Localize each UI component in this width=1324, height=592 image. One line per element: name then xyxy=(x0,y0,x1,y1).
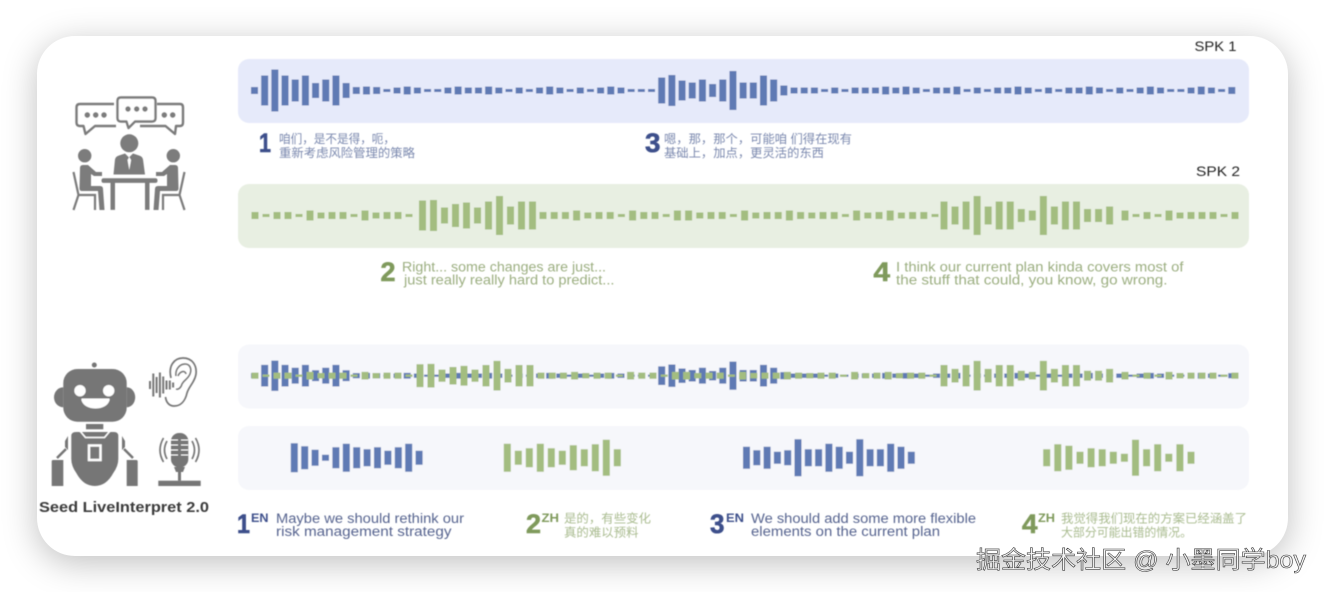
caption: speaker 2 utterance 4: 4 xyxy=(874,257,890,287)
caption: output 3 EN: elements on the current plan xyxy=(751,524,940,539)
icon: robot xyxy=(52,362,138,486)
caption: speaker 1 utterance 3: 嗯，那，那个，可能咱 们得在现有 xyxy=(664,131,852,146)
icon: ear with sound xyxy=(150,358,196,406)
caption: output 1 EN: EN xyxy=(251,511,268,525)
caption: speaker 2 utterance 2 xyxy=(380,257,614,288)
caption: output 2 ZH: ZH xyxy=(542,511,559,525)
watermark: 掘金技术社区 @ 小墨同学boy xyxy=(976,547,1306,574)
waveform: speaker 1 xyxy=(254,70,1232,112)
waveform: output 4 ZH xyxy=(1047,440,1191,476)
icon: microphone xyxy=(158,433,201,486)
icon: left person xyxy=(74,149,104,210)
caption: speaker 1 utterance 3: 基础上，加点，更灵活的东西 xyxy=(664,145,824,160)
caption: output 1 EN: 1 xyxy=(237,509,250,539)
caption: speaker 2 utterance 2: Right... some changes are just... xyxy=(402,260,606,274)
icon: central person xyxy=(114,134,145,174)
caption: output 2 ZH xyxy=(526,509,651,540)
waveform: speaker 2 xyxy=(255,196,1235,235)
caption: output 3 EN: We should add some more flexible xyxy=(751,511,976,526)
caption: output 4 ZH xyxy=(1022,509,1247,540)
caption: speaker 1 utterance 1: 重新考虑风险管理的策略 xyxy=(279,145,415,160)
caption: output 1 EN: risk management strategy xyxy=(276,524,452,539)
caption: output 4 ZH: 大部分可能出错的情况。 xyxy=(1061,524,1192,540)
caption: speaker 1 utterance 1 xyxy=(259,128,415,160)
panel: mixed input track xyxy=(238,344,1249,408)
label: model name: Seed LiveInterpret 2.0 xyxy=(39,500,209,516)
caption: speaker 2 utterance 2: just really really hard to predict... xyxy=(403,272,614,288)
icon: speech bubbles xyxy=(76,98,183,134)
waveform: output 1 EN xyxy=(294,443,419,472)
label: SPK 2: SPK 2 xyxy=(1196,163,1240,179)
caption: speaker 2 utterance 4: I think our current plan kinda covers most of xyxy=(896,260,1184,274)
waveform: mixed blue xyxy=(254,361,1232,391)
caption: output 2 ZH: 2 xyxy=(526,509,541,539)
caption: output 4 ZH: 我觉得我们现在的方案已经涵盖了 xyxy=(1061,510,1247,526)
caption: output 3 EN xyxy=(710,509,976,539)
label: SPK 1: SPK 1 xyxy=(1194,38,1237,54)
caption: speaker 1 utterance 3 xyxy=(645,128,852,160)
caption: output 3 EN: 3 xyxy=(710,509,724,539)
caption: speaker 2 utterance 4: the stuff that could, you know, go wrong. xyxy=(896,272,1168,288)
caption: output 3 EN: EN xyxy=(726,511,744,525)
panel: speaker 2 track xyxy=(238,184,1249,248)
caption: output 2 ZH: 真的难以预料 xyxy=(564,524,638,540)
caption: output 1 EN: Maybe we should rethink our xyxy=(276,511,465,526)
icon: table xyxy=(102,178,158,210)
panel: translated output track xyxy=(238,426,1249,490)
caption: speaker 2 utterance 4 xyxy=(874,257,1184,288)
waveform: output 2 ZH xyxy=(507,440,617,476)
icon: right person xyxy=(154,149,184,210)
caption: output 2 ZH: 是的，有些变化 xyxy=(564,510,651,526)
panel: speaker 1 track xyxy=(238,59,1249,123)
caption: speaker 1 utterance 1: 1 xyxy=(259,128,271,158)
caption: output 4 ZH: ZH xyxy=(1038,511,1055,525)
caption: output 1 EN xyxy=(237,509,465,539)
caption: speaker 1 utterance 3: 3 xyxy=(645,128,660,158)
waveform: mixed green xyxy=(255,361,1235,391)
caption: output 4 ZH: 4 xyxy=(1022,509,1038,539)
icon: meeting group xyxy=(74,98,184,210)
caption: speaker 1 utterance 1: 咱们，是不是得，呃， xyxy=(279,131,395,146)
waveform: output 3 EN xyxy=(746,439,911,476)
caption: speaker 2 utterance 2: 2 xyxy=(380,257,396,287)
